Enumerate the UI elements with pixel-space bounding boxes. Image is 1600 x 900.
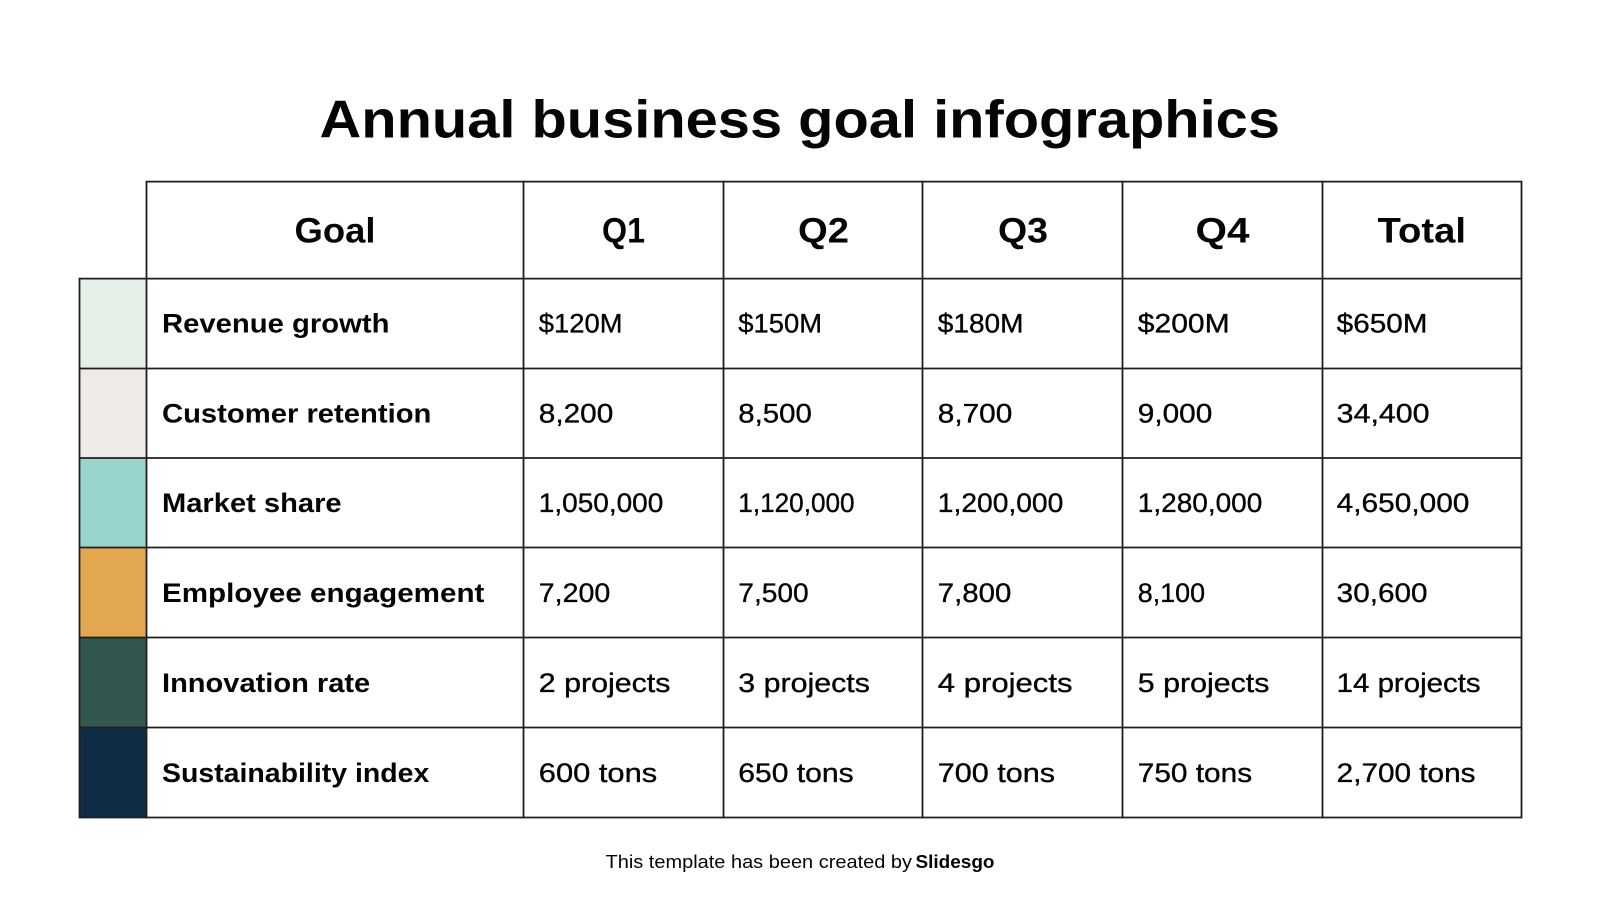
row: customer retention: Customer retention [162,398,431,428]
row: customer retention: 8,500 [738,398,812,428]
row: customer retention [162,398,1430,428]
header row: Q4 [1196,212,1250,250]
row: employee engagement [162,578,1428,608]
row: revenue growth: $120M [539,308,622,338]
row: revenue growth: $200M [1138,308,1230,338]
row: customer retention: 8,700 [938,398,1012,428]
row: employee engagement: 8,100 [1138,578,1205,608]
header row: Q2 [798,212,849,250]
row: revenue growth: $180M [938,308,1024,338]
row: sustainability index: 750 tons [1138,758,1252,788]
row: innovation rate [162,668,1481,698]
row: market share: 1,200,000 [938,488,1063,518]
row: market share: 1,050,000 [539,488,663,518]
row: revenue growth: $650M [1337,308,1428,338]
table [80,181,1522,818]
row: sustainability index: 650 tons [738,758,854,788]
title: Annual business goal infographics [320,91,1280,150]
row: innovation rate: 2 projects [539,668,670,698]
row: customer retention: 9,000 [1138,398,1212,428]
row: market share: 1,120,000 [738,488,855,518]
row: sustainability index [162,758,1476,788]
row: market share [162,488,1469,518]
row: employee engagement: 7,800 [938,578,1011,608]
row: sustainability index: 2,700 tons [1337,758,1476,788]
row: market share: Market share [162,488,342,518]
row: innovation rate: 3 projects [738,668,870,698]
row: employee engagement: 30,600 [1337,578,1428,608]
header row: Q3 [998,212,1048,250]
row: innovation rate: 4 projects [938,668,1072,698]
row: employee engagement: 7,200 [539,578,610,608]
row: customer retention: 8,200 [539,398,613,428]
row: employee engagement: Employee engagement [162,578,485,608]
row: revenue growth: $150M [738,308,822,338]
row: market share: 4,650,000 [1337,488,1469,518]
row: employee engagement: 7,500 [738,578,809,608]
row: sustainability index: 700 tons [938,758,1055,788]
footer credit: This template has been created by [606,852,912,872]
row: innovation rate: 14 projects [1337,668,1481,698]
footer credit: Slidesgo [916,852,995,872]
row: revenue growth [162,308,1428,338]
row: customer retention: 34,400 [1337,398,1430,428]
header row: Total [1378,212,1466,250]
header row: Goal [294,212,376,250]
row: innovation rate: 5 projects [1138,668,1269,698]
row: sustainability index: 600 tons [539,758,657,788]
row: market share: 1,280,000 [1138,488,1262,518]
colour swatch column [80,278,146,818]
row: sustainability index: Sustainability index [162,758,430,788]
header row [294,212,1466,250]
row: revenue growth: Revenue growth [162,308,390,338]
header row: Q1 [602,212,645,250]
row: innovation rate: Innovation rate [162,668,370,698]
